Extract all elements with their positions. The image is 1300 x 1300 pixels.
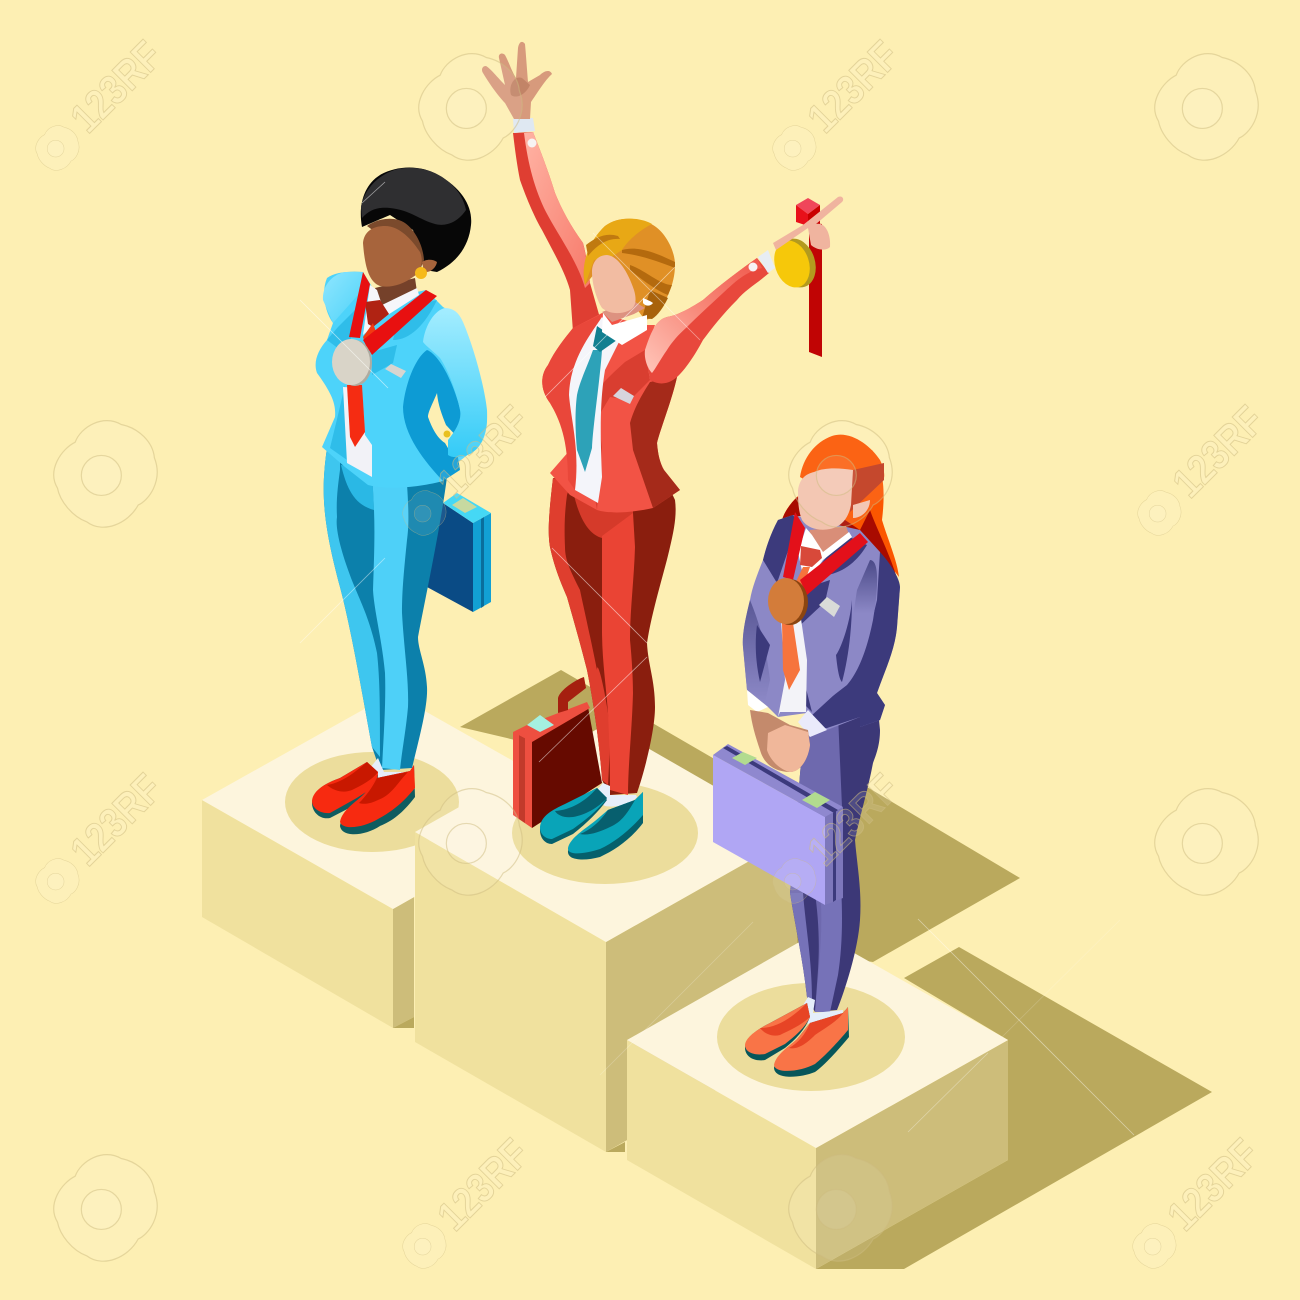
trousers (549, 478, 676, 795)
watermarks: stock logo and wordmark: 123RF (61, 32, 171, 141)
briefcase: purple (713, 744, 843, 905)
trousers (324, 448, 447, 770)
briefcase: blue (427, 493, 491, 612)
watermarks: stock logo and wordmark: 123RF (428, 1130, 538, 1239)
watermarks: stock logo and wordmark: 123RF (1163, 397, 1273, 506)
jacket (542, 313, 680, 512)
shirt (343, 387, 372, 477)
figure: third place woman in purple suit (713, 435, 900, 1077)
white shirt (778, 612, 807, 717)
face (798, 468, 870, 530)
pointing hand (773, 196, 843, 250)
trousers (790, 710, 880, 1012)
hair: black afro (361, 167, 471, 272)
diagonal sparkle lines (300, 182, 1134, 1135)
marker circle on second place block (285, 752, 459, 852)
watermarks: stock logo and wordmark: 123RF (1158, 1130, 1268, 1239)
extended arm (645, 250, 775, 383)
podium: second place block (202, 693, 584, 1028)
name badge (613, 388, 634, 404)
figure: first place woman in red suit (482, 42, 843, 859)
cuff button (444, 430, 450, 438)
medal: gold (768, 234, 822, 292)
jacket (743, 515, 900, 730)
face (592, 255, 653, 345)
podium: third place block (627, 932, 1008, 1269)
white shirt (569, 317, 620, 503)
watermarks: stock logo and wordmark: 123RF (798, 765, 908, 874)
sleeve (423, 308, 487, 457)
shoes: orange (745, 1003, 849, 1077)
orange tie (782, 623, 800, 690)
podium: first place block (415, 724, 797, 1152)
name badge (819, 597, 840, 617)
earring (415, 267, 427, 279)
neck and collar (363, 278, 419, 352)
socks (363, 758, 410, 783)
red tie (347, 385, 365, 447)
cuffs (747, 690, 827, 737)
medal: silver (332, 339, 372, 386)
briefcase: red (513, 677, 602, 828)
medal: bronze (768, 578, 808, 625)
watermarks: stock logo and wordmark: 123RF (61, 765, 171, 874)
socks (797, 997, 843, 1025)
raised arm (513, 132, 600, 332)
teal tie (576, 326, 617, 472)
neck and collar (793, 526, 852, 590)
clasped hands (750, 710, 810, 772)
medal ribbon (783, 512, 868, 595)
shoes: red (312, 762, 415, 834)
medal ribbon (349, 272, 437, 355)
watermarks: stock logo and wordmark: 123RF (798, 32, 908, 141)
hair front (800, 435, 884, 512)
socks (591, 783, 637, 807)
hair: blonde (584, 219, 675, 320)
shoes: teal (540, 788, 643, 859)
marker circle on first place block (512, 782, 698, 884)
marker circle on third place block (717, 983, 905, 1091)
inner arm (403, 350, 462, 481)
jacket (316, 272, 487, 488)
watermarks: stock logo and wordmark: 123RF (428, 397, 538, 506)
face (363, 219, 437, 287)
raised hand (482, 42, 552, 133)
gold medal ribbon (796, 198, 822, 357)
name badge (385, 364, 406, 378)
shadows of the podium blocks (460, 670, 1212, 1269)
figure: second place woman in blue suit (312, 167, 491, 834)
hair back (782, 450, 899, 577)
